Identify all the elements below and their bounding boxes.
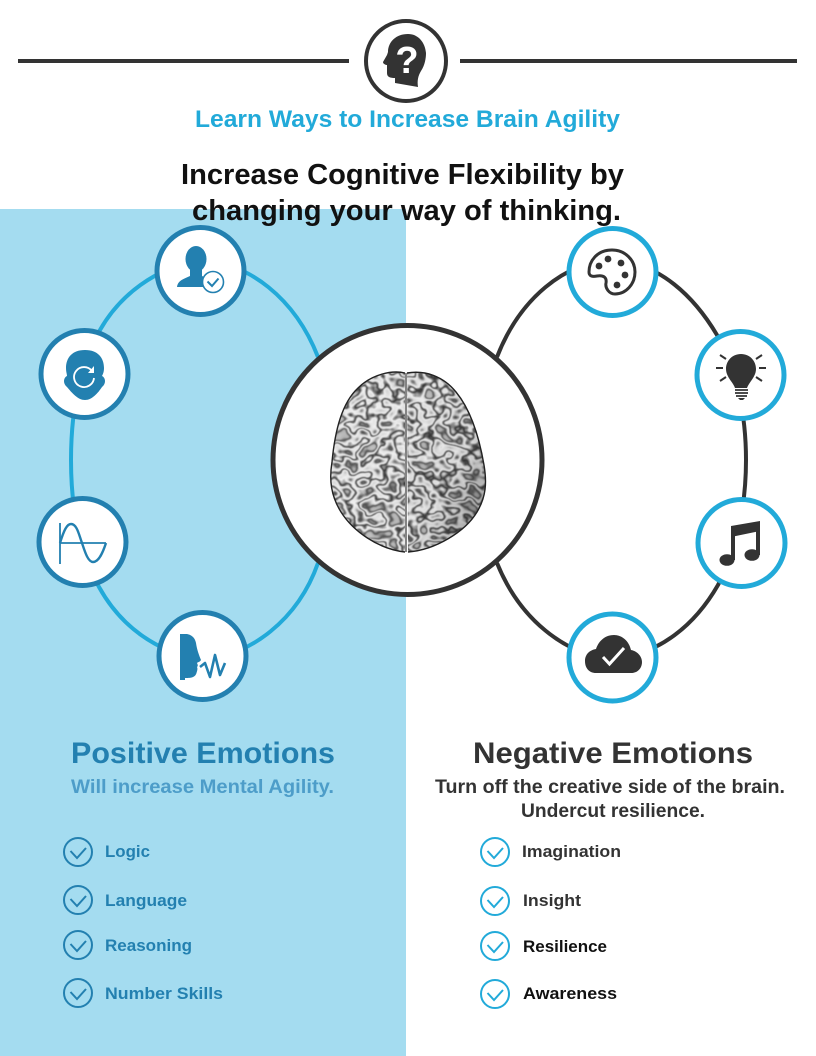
title: Learn Ways to Increase Brain Agility	[195, 106, 621, 133]
heading: negative emotions: Negative Emotions	[473, 737, 753, 770]
subheading: negative: Undercut resilience.	[521, 801, 705, 822]
node: light bulb	[697, 332, 784, 418]
node: sine wave	[39, 498, 126, 586]
subheading: positive: Will increase Mental Agility.	[71, 777, 334, 798]
heading: positive emotions: Positive Emotions	[71, 737, 335, 770]
list: negative emotions: Insight	[523, 891, 581, 910]
node: head with refresh	[41, 330, 128, 418]
node: person with check	[157, 228, 244, 314]
list: positive emotions: Logic	[105, 842, 150, 861]
ring: positive emotions	[71, 260, 318, 660]
panel: positive emotions background	[0, 209, 406, 1056]
heading: Increase Cognitive Flexibility by	[181, 159, 624, 191]
list: positive emotions: Language	[105, 891, 187, 910]
node: music note	[698, 500, 785, 586]
list: positive emotions: Reasoning	[105, 936, 192, 955]
list: negative emotions: Imagination	[522, 842, 621, 861]
subheading: negative	[435, 777, 785, 822]
icon: head with question mark: ?	[395, 40, 419, 82]
icon: head with question mark	[366, 21, 446, 101]
list: negative emotions: Awareness	[523, 984, 617, 1003]
node: speaking head	[159, 612, 246, 700]
node: cloud with check	[569, 614, 656, 701]
ring: negative emotions	[497, 260, 746, 660]
subheading: negative: Turn off the creative side of the brain.	[435, 777, 785, 798]
center circle with brain	[273, 326, 542, 594]
illustration: brain	[328, 368, 488, 555]
list: positive emotions: Number Skills	[105, 984, 223, 1003]
heading	[181, 159, 624, 227]
header rule right	[460, 59, 797, 63]
heading: changing your way of thinking.	[192, 195, 621, 227]
header rule left	[18, 59, 349, 63]
list: positive emotions	[64, 838, 223, 1007]
list: negative emotions: Resilience	[523, 937, 607, 956]
node: palette	[569, 228, 656, 316]
list: negative emotions	[481, 838, 621, 1008]
